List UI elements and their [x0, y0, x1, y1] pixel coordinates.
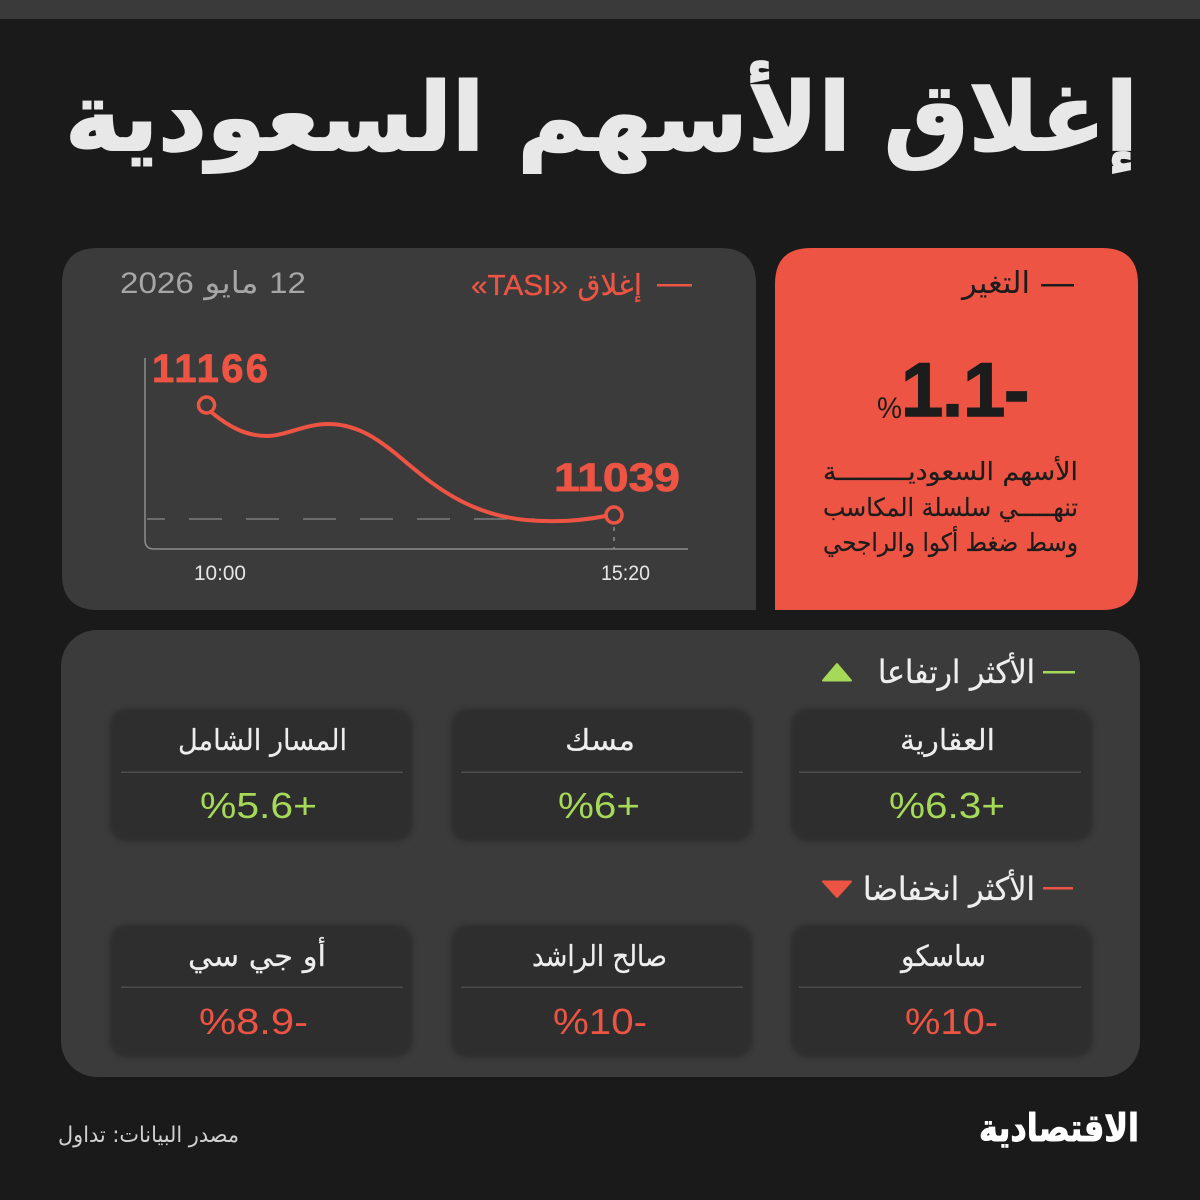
card: Al Masar Al Shamil: المسار الشامل: [178, 723, 347, 757]
card: Maaden Musk: مسك: [565, 723, 635, 757]
change value: 1.1-: [901, 348, 1029, 433]
card: OGC: أو جي سي: [188, 936, 326, 974]
chart heading: إغلاق «TASI»: [471, 268, 642, 303]
card: Saleh Al Rashed: [450, 924, 753, 1058]
line chart: 10:00: [194, 562, 246, 585]
card: Sasco: [790, 924, 1093, 1058]
card: Maaden Musk: [450, 708, 753, 842]
card: Al Masar Al Shamil: %5.6+: [200, 785, 317, 826]
card: Saleh Al Rashed: صالح الراشد: [532, 939, 667, 973]
line chart: 11166: [152, 347, 268, 391]
gainers heading: الأكثر ارتفاعا: [878, 652, 1035, 691]
icon: up triangle: [823, 664, 851, 680]
card: OGC: %8.9-: [199, 1001, 308, 1042]
card: Al Masar Al Shamil: [109, 708, 413, 842]
logo: الاقتصادية: [979, 1106, 1139, 1150]
icon: down triangle: [823, 882, 851, 897]
change heading: [960, 266, 1074, 301]
change heading: التغير: [960, 266, 1030, 301]
card: OGC: [109, 924, 413, 1058]
change description: وسط ضغط أكوا والراجحي: [823, 525, 1078, 558]
card: Maaden Musk: %6+: [558, 785, 640, 826]
source note: مصدر البيانات: تداول: [58, 1123, 239, 1148]
card: Sasco: ساسكو: [899, 939, 986, 973]
card: Al Akaria: العقارية: [900, 723, 995, 757]
top bar: [0, 0, 1200, 19]
card: Al Akaria: [790, 708, 1093, 842]
card: Al Akaria: %6.3+: [889, 785, 1005, 826]
panel: top movers: [61, 630, 1140, 1077]
change value: %: [877, 392, 902, 425]
losers heading: الأكثر انخفاضا: [863, 869, 1035, 908]
line chart: 15:20: [601, 562, 650, 585]
panel: change: [775, 248, 1138, 610]
card: Sasco: %10-: [905, 1001, 998, 1042]
line chart: [145, 347, 688, 585]
card: Saleh Al Rashed: %10-: [553, 1001, 647, 1042]
title: إغلاق الأسهم السعودية: [65, 62, 1138, 173]
change description: تنهـــــي سلسلة المكاسب: [823, 493, 1078, 523]
line chart: 11039: [554, 456, 680, 500]
change description: [823, 455, 1078, 558]
change description: الأسهم السعوديـــــــــة: [823, 455, 1078, 487]
panel: TASI chart: [62, 248, 756, 610]
date: 12 مايو 2026: [120, 266, 306, 301]
